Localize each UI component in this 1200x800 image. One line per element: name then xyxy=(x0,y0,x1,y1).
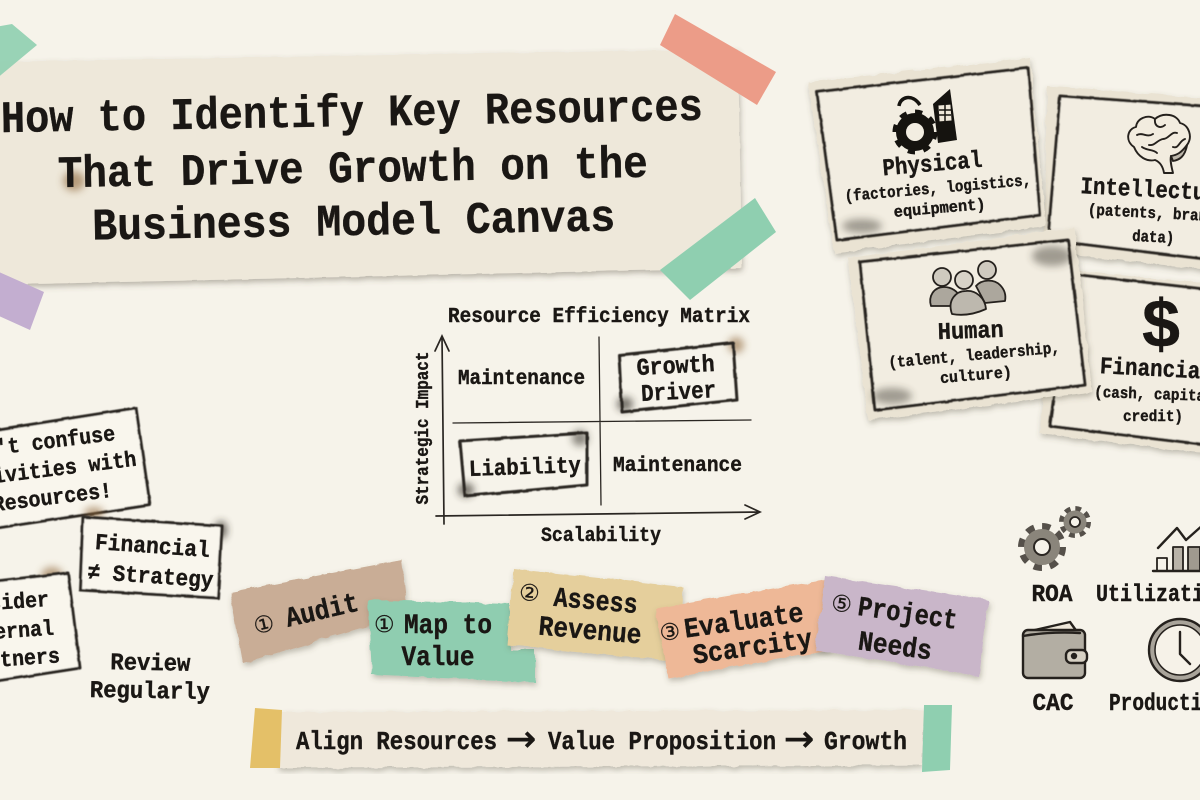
quadrant: growth driver: Driver xyxy=(641,378,717,409)
text: physical examples: (factories, logistics, xyxy=(844,172,1032,206)
step: audit xyxy=(230,560,408,663)
step: project needs: Project xyxy=(856,593,959,638)
banner text xyxy=(296,719,907,760)
text: review regularly: Review xyxy=(110,650,191,679)
step: map to value xyxy=(368,600,535,682)
banner text: → xyxy=(784,719,814,760)
x axis label: Scalability xyxy=(541,525,661,548)
tape: green top left xyxy=(0,24,37,84)
text: physical examples xyxy=(844,172,1034,226)
metric: productivity xyxy=(1109,619,1200,718)
callout: external partners xyxy=(0,567,80,685)
icon: clock xyxy=(1149,619,1200,681)
text: review regularly xyxy=(90,650,211,707)
callout: financial not strategy: Financial xyxy=(94,530,211,564)
y axis label: Strategic Impact xyxy=(414,352,434,504)
text: human examples: (talent, leadership, xyxy=(888,340,1061,372)
card: physical xyxy=(808,58,1046,253)
step: project needs: ⑤ xyxy=(830,590,854,619)
icon: bar chart with trend line xyxy=(1153,524,1200,571)
step: assess revenue xyxy=(507,569,683,660)
step: assess revenue: Revenue xyxy=(537,613,643,652)
tape: purple bottom left xyxy=(0,268,44,330)
text: physical examples: equipment) xyxy=(893,196,986,222)
title xyxy=(0,83,705,255)
text: human examples: culture) xyxy=(939,364,1013,388)
icon: wallet xyxy=(1023,622,1087,678)
step: assess revenue: Assess xyxy=(552,584,639,622)
banner text: Growth xyxy=(824,727,907,757)
heading: physical: Physical xyxy=(882,148,984,183)
icon: factory and gear xyxy=(896,89,957,152)
banner text: Value Proposition xyxy=(548,727,776,757)
metric: utilization xyxy=(1096,524,1200,609)
callout: financial not strategy xyxy=(80,507,227,598)
step: evaluate scarcity: ③ xyxy=(658,618,682,647)
text: human examples xyxy=(888,340,1062,392)
icon: brain xyxy=(1128,115,1190,173)
chart title: Resource Efficiency Matrix xyxy=(448,306,750,329)
metric: CAC xyxy=(1023,622,1087,718)
card: intellectual: data) xyxy=(1132,228,1175,248)
step: assess revenue: ② xyxy=(518,580,541,607)
y axis arrow xyxy=(435,336,449,524)
title: That Drive Growth on the xyxy=(57,140,648,201)
tape: yellow xyxy=(250,708,282,768)
icon: people xyxy=(930,261,1005,315)
banner: align resources xyxy=(250,705,952,772)
icon: gears xyxy=(1022,509,1088,567)
title: Business Model Canvas xyxy=(92,193,616,254)
quadrant dividers xyxy=(453,337,751,505)
step: evaluate scarcity xyxy=(655,580,830,678)
heading: human: Human xyxy=(937,318,1004,347)
card: human xyxy=(848,228,1092,420)
step: project needs: Needs xyxy=(856,627,934,668)
step: map to value: Value xyxy=(402,643,474,674)
callout: activities vs resources xyxy=(0,408,150,532)
step: evaluate scarcity: Evaluate xyxy=(682,599,806,647)
banner text: Align Resources xyxy=(296,727,497,757)
quadrant: top left: Maintenance xyxy=(458,368,585,391)
card: intellectual xyxy=(1044,86,1200,272)
quadrant: growth driver xyxy=(617,337,744,412)
tape: red top right xyxy=(660,14,776,105)
metric: ROA: ROA xyxy=(1032,582,1073,609)
card: financial xyxy=(1040,268,1200,456)
banner text: → xyxy=(506,719,536,760)
title: How to Identify Key Resources xyxy=(0,83,703,146)
step: map to value: Map to xyxy=(404,611,492,642)
step: evaluate scarcity: Scarcity xyxy=(691,625,815,673)
step: audit: ① xyxy=(251,610,277,640)
metric: ROA xyxy=(1022,509,1088,609)
quadrant: growth driver: Growth xyxy=(636,352,715,383)
icon: dollar sign: $ xyxy=(1142,286,1180,362)
step: project needs xyxy=(815,576,988,676)
card: financial: credit) xyxy=(1123,408,1183,426)
quadrant: liability: Liability xyxy=(469,453,582,483)
x axis arrow xyxy=(436,505,760,519)
text: review regularly: Regularly xyxy=(90,678,210,707)
step: map to value: ① xyxy=(374,612,395,638)
stain on title xyxy=(63,171,85,191)
quadrant: liability xyxy=(458,430,588,497)
panel: title banner xyxy=(0,14,776,330)
tape: green xyxy=(922,705,952,772)
step: audit: Audit xyxy=(283,589,362,636)
metric: CAC: CAC xyxy=(1032,691,1074,718)
chart: resource efficiency matrix xyxy=(414,306,760,548)
tape: green bottom right xyxy=(660,198,776,300)
callout: financial not strategy: ≠ Strategy xyxy=(87,560,214,594)
quadrant: bottom right: Maintenance xyxy=(613,455,742,478)
